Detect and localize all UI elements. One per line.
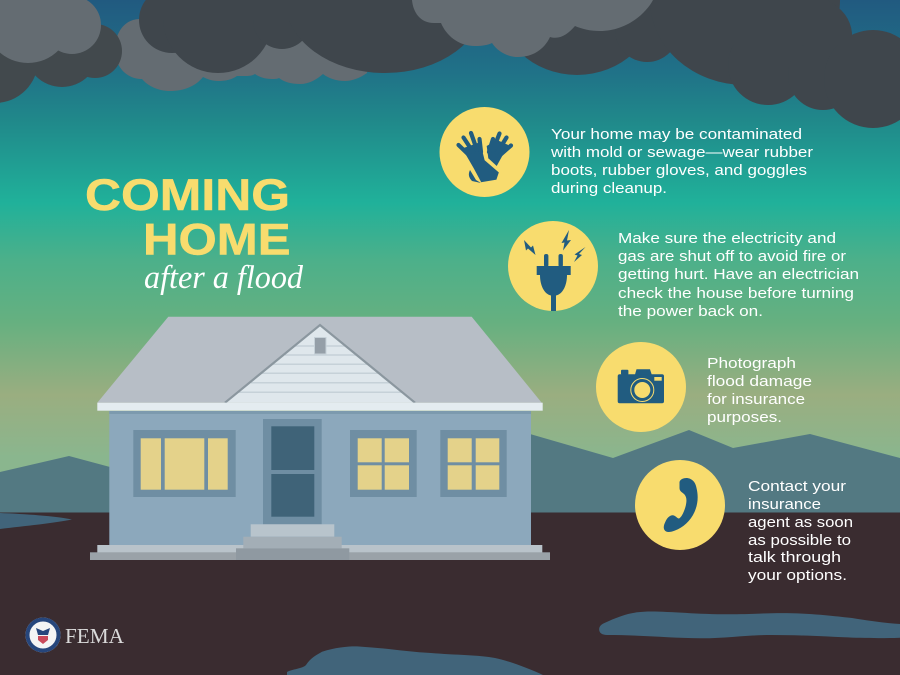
right glove: [487, 134, 511, 166]
text block: protective gear: Your home may be contaminated: [551, 126, 802, 143]
title: [85, 171, 303, 296]
fascia: [97, 403, 543, 411]
roof: [97, 317, 542, 403]
house: [90, 317, 550, 560]
title: HOME: [143, 216, 290, 264]
text block: electricity and gas: gas are shut off to avoid fire or: [618, 248, 846, 265]
ground: [0, 512, 900, 675]
text block: contact insurance: insurance: [748, 496, 821, 513]
text block: contact insurance: talk through: [748, 549, 841, 566]
clouds: top-centre grey: [412, 0, 653, 57]
icon: gloves: [440, 107, 530, 197]
text block: protective gear: during cleanup.: [551, 180, 667, 197]
text block: electricity and gas: [618, 230, 859, 320]
text block: photograph damage: purposes.: [707, 409, 782, 426]
title: COMING: [85, 171, 290, 220]
text block: protective gear: boots, rubber gloves, and goggles: [551, 162, 807, 179]
text block: photograph damage: [707, 355, 812, 426]
window: middle: [350, 430, 417, 497]
title: after a flood: [144, 260, 303, 296]
icon: DHS seal: [26, 618, 60, 652]
left glove: [458, 133, 499, 183]
text block: contact insurance: Contact your: [748, 478, 846, 495]
text block: photograph damage: for insurance: [707, 391, 805, 408]
foundation: [90, 545, 550, 560]
text block: protective gear: [550, 126, 813, 197]
puddle: left: [0, 513, 72, 529]
text block: photograph damage: flood damage: [707, 373, 812, 390]
door: [263, 419, 322, 524]
puddle: right: [599, 611, 900, 638]
clouds: top-left grey: [0, 0, 101, 63]
text block: contact insurance: [748, 478, 853, 584]
wall: [109, 411, 531, 546]
FEMA logo: [26, 618, 125, 652]
lightning bolts: [524, 240, 536, 255]
clouds: dark main bank: [139, 0, 900, 128]
window: left: [133, 430, 236, 497]
text block: electricity and gas: check the house before turning: [618, 285, 854, 302]
text block: photograph damage: Photograph: [707, 355, 796, 372]
text block: electricity and gas: getting hurt. Have an electrician: [618, 266, 859, 283]
text block: contact insurance: your options.: [748, 567, 847, 584]
mountains: [0, 430, 900, 514]
icon: phone: [635, 460, 725, 550]
icon: plug: [508, 221, 598, 311]
icon: camera: [596, 342, 686, 432]
puddle: bottom: [287, 646, 543, 675]
sky background: [0, 0, 900, 520]
text block: contact insurance: as possible to: [748, 532, 851, 549]
steps: [236, 524, 349, 560]
text block: contact insurance: agent as soon: [748, 514, 853, 531]
text block: electricity and gas: Make sure the electricity and: [618, 230, 836, 247]
gable: [225, 325, 415, 403]
clouds: top-left dark: [0, 13, 122, 103]
clouds: back grey centre: [115, 19, 370, 91]
text block: electricity and gas: the power back on.: [618, 303, 763, 320]
FEMA logo: FEMA: [65, 624, 125, 648]
window: right: [440, 430, 507, 497]
text block: protective gear: with mold or sewage—wear rubber: [550, 144, 813, 161]
